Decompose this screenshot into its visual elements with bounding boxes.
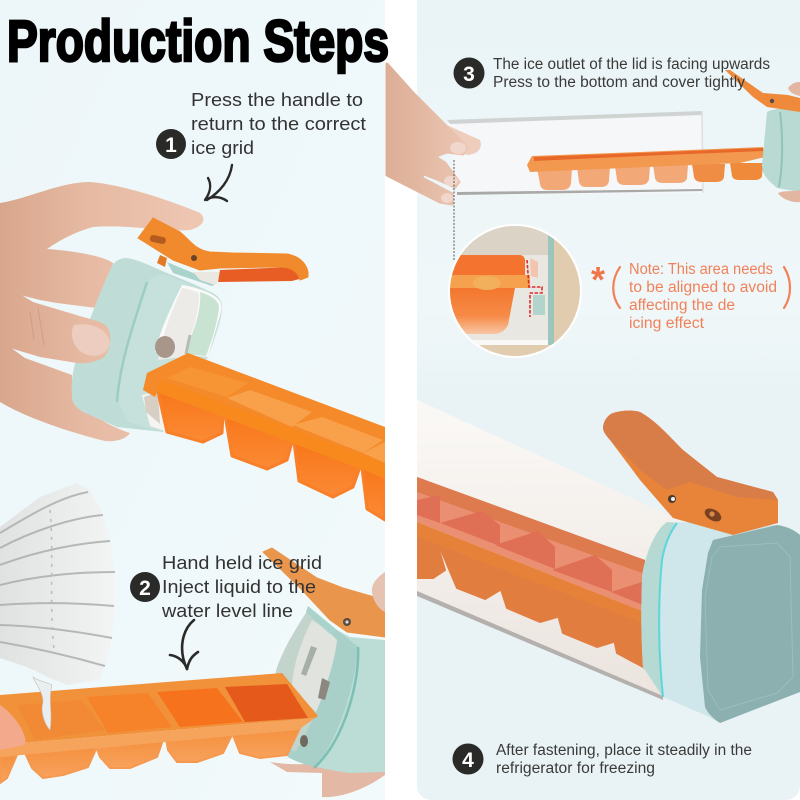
- handle: [138, 218, 308, 286]
- step 1 text: ice grid: [191, 137, 254, 158]
- step 2 text: Hand held ice grid: [162, 552, 322, 573]
- handle: [603, 411, 778, 535]
- photo: step 1 hand pressing the handle: [0, 182, 385, 520]
- ice tray in tube: [527, 147, 765, 190]
- magnified detail circle: [448, 224, 582, 358]
- note brackets: [613, 267, 790, 308]
- photo: step 3 hand and tube: [387, 64, 800, 358]
- hand nails: [441, 142, 466, 203]
- note asterisk: *: [591, 259, 605, 300]
- panel: left background: [0, 0, 385, 800]
- step 1 text: Press the handle to: [191, 89, 363, 110]
- step 3 text: The ice outlet of the lid is facing upwards: [493, 56, 770, 73]
- step 3 text: Press to the bottom and cover tightly: [493, 74, 745, 91]
- step 2 text: water level line: [161, 600, 293, 621]
- lid: [273, 610, 385, 773]
- step 3 text: [493, 56, 770, 91]
- step 2 text: [161, 552, 322, 621]
- note text: Note: This area needs: [629, 261, 773, 278]
- note text: to be aligned to avoid: [629, 279, 777, 296]
- ice tray: [143, 353, 385, 520]
- step 1 number badge: 1: [165, 134, 177, 157]
- note text: icing effect: [629, 315, 705, 332]
- arrow: step 1: [205, 165, 232, 201]
- note text: affecting the de: [629, 297, 735, 314]
- dotted guide line: [453, 160, 455, 260]
- step 2 number badge: [130, 572, 160, 602]
- lid: [641, 522, 800, 723]
- title: Production Steps: [7, 9, 389, 74]
- step 3 number badge: [454, 58, 484, 88]
- step 4 text: After fastening, place it steadily in the: [496, 742, 752, 759]
- step 2 number badge: 2: [139, 577, 151, 600]
- photo: step 4 assembled product: [417, 400, 800, 723]
- step 4 number badge: [452, 744, 484, 774]
- step 4 number badge: 4: [462, 749, 474, 772]
- ice tray: [417, 477, 645, 668]
- tube: [447, 111, 703, 195]
- step 1 number badge: [156, 129, 186, 159]
- thumb: [372, 572, 385, 612]
- tube: [417, 400, 680, 697]
- hand: fingers behind lid: [0, 182, 203, 441]
- water stream: [33, 677, 52, 730]
- step 3 number badge: 3: [463, 63, 475, 86]
- thumb: [0, 282, 110, 363]
- ice tray with cells: [0, 673, 318, 783]
- hand holding lid: [270, 762, 385, 798]
- photo: step 2 pouring: [0, 483, 385, 797]
- handle: [263, 548, 385, 637]
- arrow: step 2: [170, 620, 198, 669]
- lid: [72, 258, 222, 432]
- step 4 text: [496, 742, 752, 777]
- handle and lid: [725, 70, 800, 202]
- step 1 text: return to the correct: [191, 113, 366, 134]
- step 4 text: refrigerator for freezing: [496, 760, 655, 777]
- step 2 text: Inject liquid to the: [162, 576, 316, 597]
- step 1 text: [191, 89, 366, 158]
- hand: [387, 64, 481, 204]
- glass jug: [0, 483, 115, 685]
- note text: [629, 261, 777, 332]
- panel: right background: [417, 0, 800, 800]
